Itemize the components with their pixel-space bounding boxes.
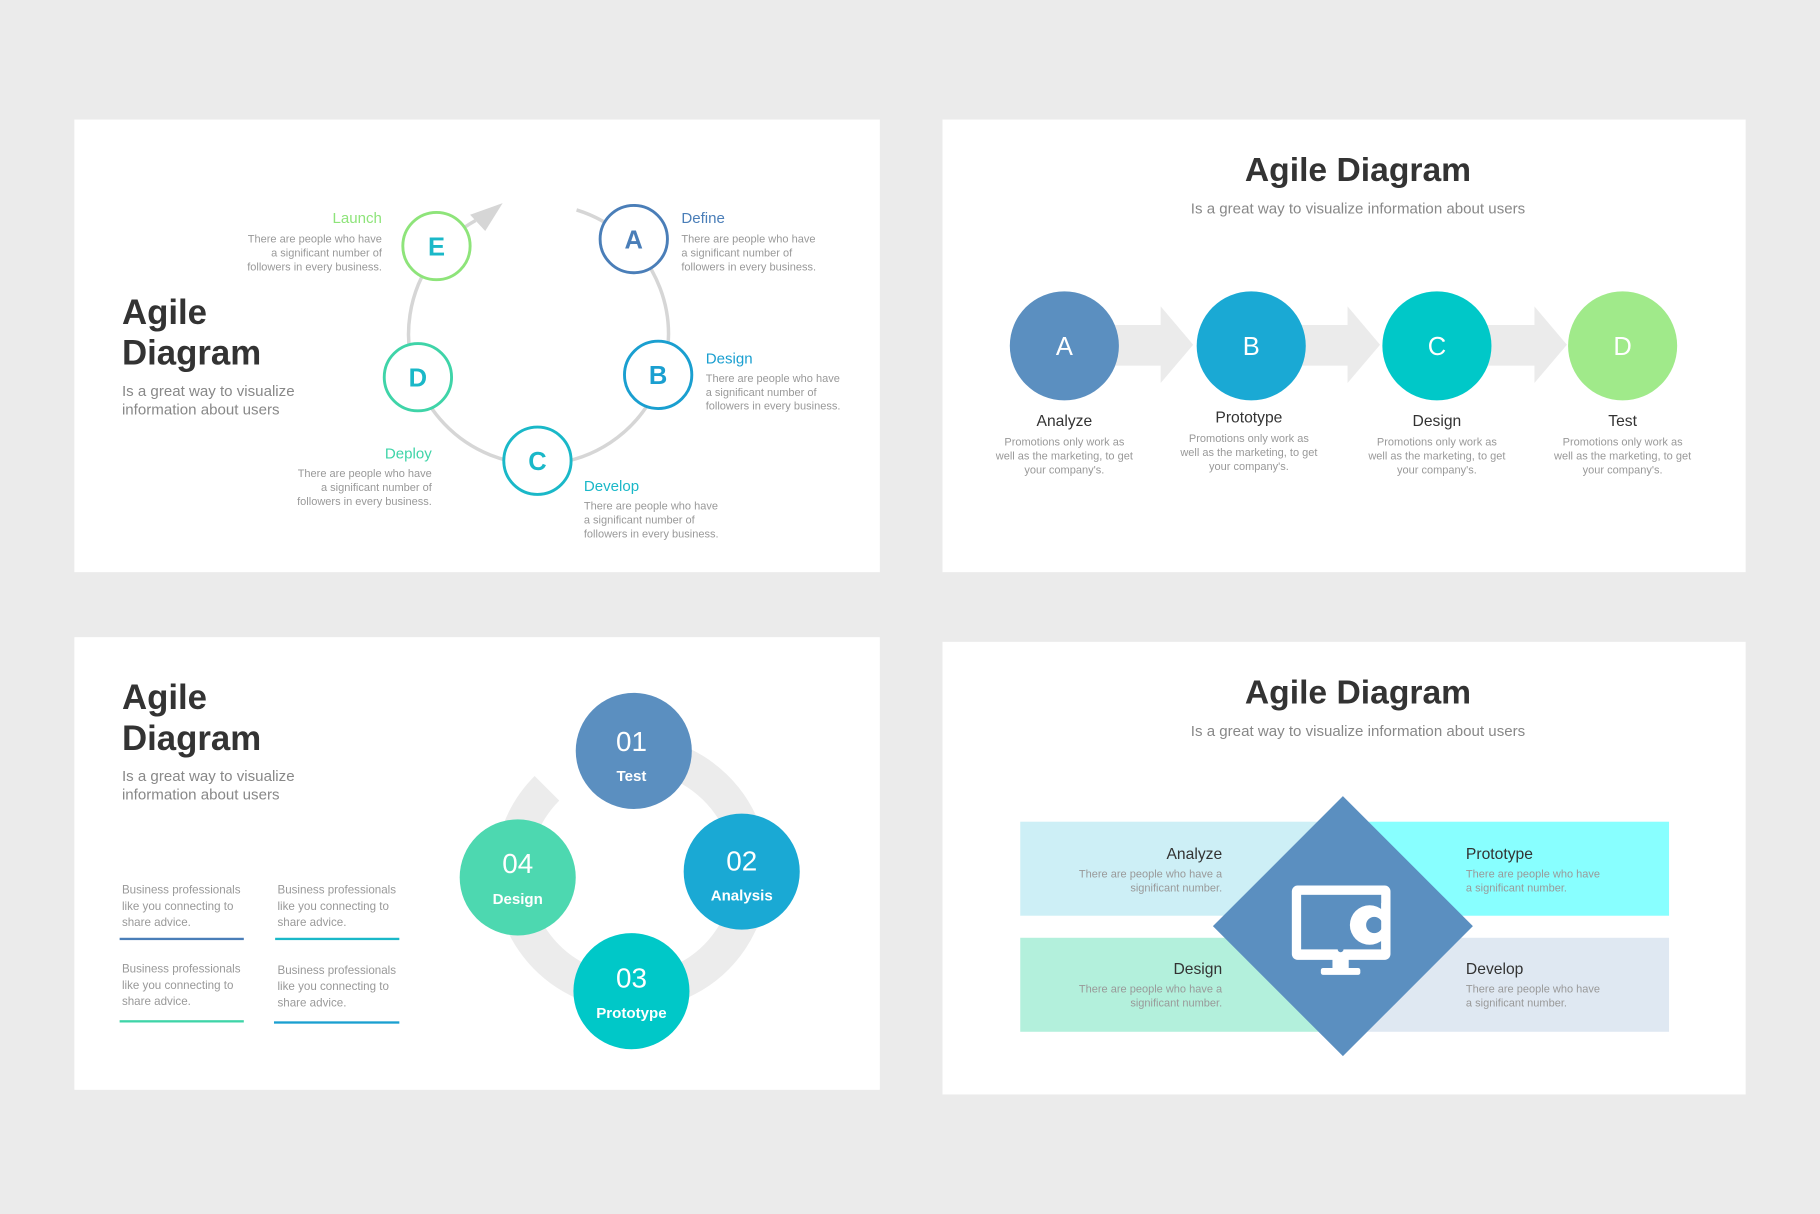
label: Launch [247, 210, 383, 273]
step texts: well as the marketing, to get [1553, 451, 1691, 463]
circle 02: 02 [726, 845, 757, 876]
text blocks: Business professionals [277, 964, 396, 977]
node D: D [409, 364, 427, 392]
subtitle [122, 383, 295, 418]
step texts: your company's. [1397, 465, 1477, 477]
step texts: well as the marketing, to get [995, 451, 1133, 463]
step A: A [1056, 333, 1073, 361]
label: Launch: Launch [332, 210, 382, 227]
text blocks: like you connecting to [122, 900, 233, 913]
panel: diamond quadrants: a significant number. [1466, 882, 1567, 894]
node E [403, 212, 470, 280]
label: Launch: followers in every business. [247, 261, 382, 273]
node C: C [528, 448, 547, 476]
label: Design: followers in every business. [706, 401, 840, 413]
label: Develop: a significant number of [584, 514, 696, 526]
node C [504, 427, 571, 494]
subtitle: Is a great way to visualize [122, 768, 295, 785]
label: Define [681, 210, 816, 273]
label: Develop: Develop [584, 478, 639, 495]
step texts: your company's. [1209, 461, 1289, 473]
node D [384, 344, 452, 411]
step texts: your company's. [1024, 465, 1104, 477]
panel: diamond quadrants: There are people who have [1466, 983, 1600, 995]
quadrant texts: Design [1173, 961, 1222, 978]
panel: linear process [942, 120, 1746, 572]
node B: B [649, 362, 667, 390]
label: Design: There are people who have [706, 373, 840, 385]
node E: E [428, 233, 445, 261]
text blocks: share advice. [277, 916, 346, 929]
label: Design: a significant number of [706, 387, 818, 399]
arrows [1108, 306, 1567, 383]
arrow head [470, 203, 503, 231]
label: Deploy: Deploy [385, 445, 432, 462]
label: Design [706, 350, 840, 413]
text blocks: like you connecting to [277, 980, 389, 993]
panel: diamond quadrants [942, 642, 1746, 1094]
label: Design: Design [706, 350, 753, 367]
step texts [995, 409, 1691, 477]
label: Define: Define [681, 210, 725, 227]
circle 02: Analysis [711, 888, 773, 905]
panel: circular agile cycle [74, 120, 880, 572]
text blocks: share advice. [122, 916, 191, 929]
label: Deploy: followers in every business. [297, 496, 432, 508]
text blocks: like you connecting to [277, 900, 389, 913]
circle 03: Prototype [596, 1005, 667, 1022]
quadrant texts: There are people who have a [1079, 868, 1223, 880]
panel: diamond quadrants: a significant number. [1466, 997, 1567, 1009]
step texts: Promotions only work as [1004, 437, 1125, 449]
cycle ring [409, 210, 669, 464]
subtitle: information about users [122, 401, 280, 418]
label: Develop: followers in every business. [584, 528, 719, 540]
subtitle [122, 768, 295, 804]
step texts: Design [1413, 413, 1461, 430]
text blocks: share advice. [122, 995, 191, 1008]
label: Define: There are people who have [681, 234, 815, 246]
quadrant texts: Analyze [1167, 846, 1222, 863]
panel: diamond quadrants: Prototype [1466, 846, 1533, 863]
quadrant texts: There are people who have a [1079, 983, 1223, 995]
label: Launch: a significant number of [271, 247, 383, 259]
title: Agile [122, 678, 207, 717]
text blocks: Business professionals [122, 963, 241, 976]
step texts: well as the marketing, to get [1367, 451, 1505, 463]
circle 04: 04 [502, 848, 533, 879]
subtitle: information about users [122, 787, 280, 804]
label: Deploy: There are people who have [298, 468, 432, 480]
step C: C [1428, 333, 1446, 361]
center diamond [1213, 796, 1473, 1056]
circle 03 [573, 933, 689, 1049]
label: Develop [584, 478, 719, 540]
circle 03: 03 [616, 963, 647, 994]
quadrant bars [1020, 822, 1344, 916]
step B [1197, 291, 1306, 400]
circle 04: Design [493, 891, 543, 908]
icon: monitor with gear [1292, 886, 1390, 975]
panel: diamond quadrants: Develop [1466, 961, 1524, 978]
step texts: Promotions only work as [1189, 433, 1309, 445]
step D [1568, 291, 1677, 400]
text blocks: like you connecting to [122, 979, 233, 992]
title: Agile Diagram [1245, 152, 1471, 189]
title: Diagram [122, 719, 261, 758]
title [122, 293, 261, 372]
quadrant texts: significant number. [1130, 882, 1222, 894]
circle 04 [460, 819, 576, 935]
subtitle: Is a great way to visualize [122, 383, 295, 400]
step texts: well as the marketing, to get [1179, 447, 1317, 459]
text blocks: Business professionals [122, 884, 241, 897]
subtitle: Is a great way to visualize information about users [1191, 201, 1525, 218]
circle 01: Test [617, 768, 646, 785]
title: Agile Diagram [1245, 674, 1471, 711]
panel: diamond quadrants: There are people who have [1466, 868, 1600, 880]
text blocks: share advice. [277, 996, 346, 1009]
step D: D [1613, 333, 1632, 361]
label: Define: a significant number of [681, 247, 793, 259]
label: Develop: There are people who have [584, 501, 718, 513]
label: Deploy: a significant number of [321, 482, 433, 494]
node B [624, 341, 692, 409]
circle 02 [684, 814, 800, 930]
step texts: Promotions only work as [1377, 437, 1497, 449]
step texts: Test [1608, 413, 1638, 430]
title: Diagram [122, 333, 261, 372]
step texts: your company's. [1583, 465, 1663, 477]
text blocks [122, 884, 396, 1009]
text blocks: Business professionals [277, 884, 396, 897]
step texts: Prototype [1215, 409, 1283, 426]
step texts: Promotions only work as [1563, 437, 1683, 449]
node A: A [625, 226, 643, 254]
title [122, 678, 261, 758]
label: Define: followers in every business. [681, 261, 816, 273]
subtitle: Is a great way to visualize information about users [1191, 723, 1525, 740]
quadrant texts [1079, 846, 1223, 1009]
panel: numbered cycle [74, 637, 880, 1090]
step texts: Analyze [1037, 413, 1093, 430]
label: Launch: There are people who have [248, 234, 382, 246]
step C [1382, 291, 1491, 400]
circle 01: 01 [616, 726, 647, 757]
cycle ring [512, 753, 751, 992]
label: Deploy [297, 445, 433, 508]
node A [600, 205, 667, 273]
step A [1010, 291, 1119, 400]
step B: B [1243, 333, 1260, 361]
title: Agile [122, 293, 207, 332]
quadrant texts: significant number. [1130, 997, 1222, 1009]
circle 01 [576, 693, 692, 809]
